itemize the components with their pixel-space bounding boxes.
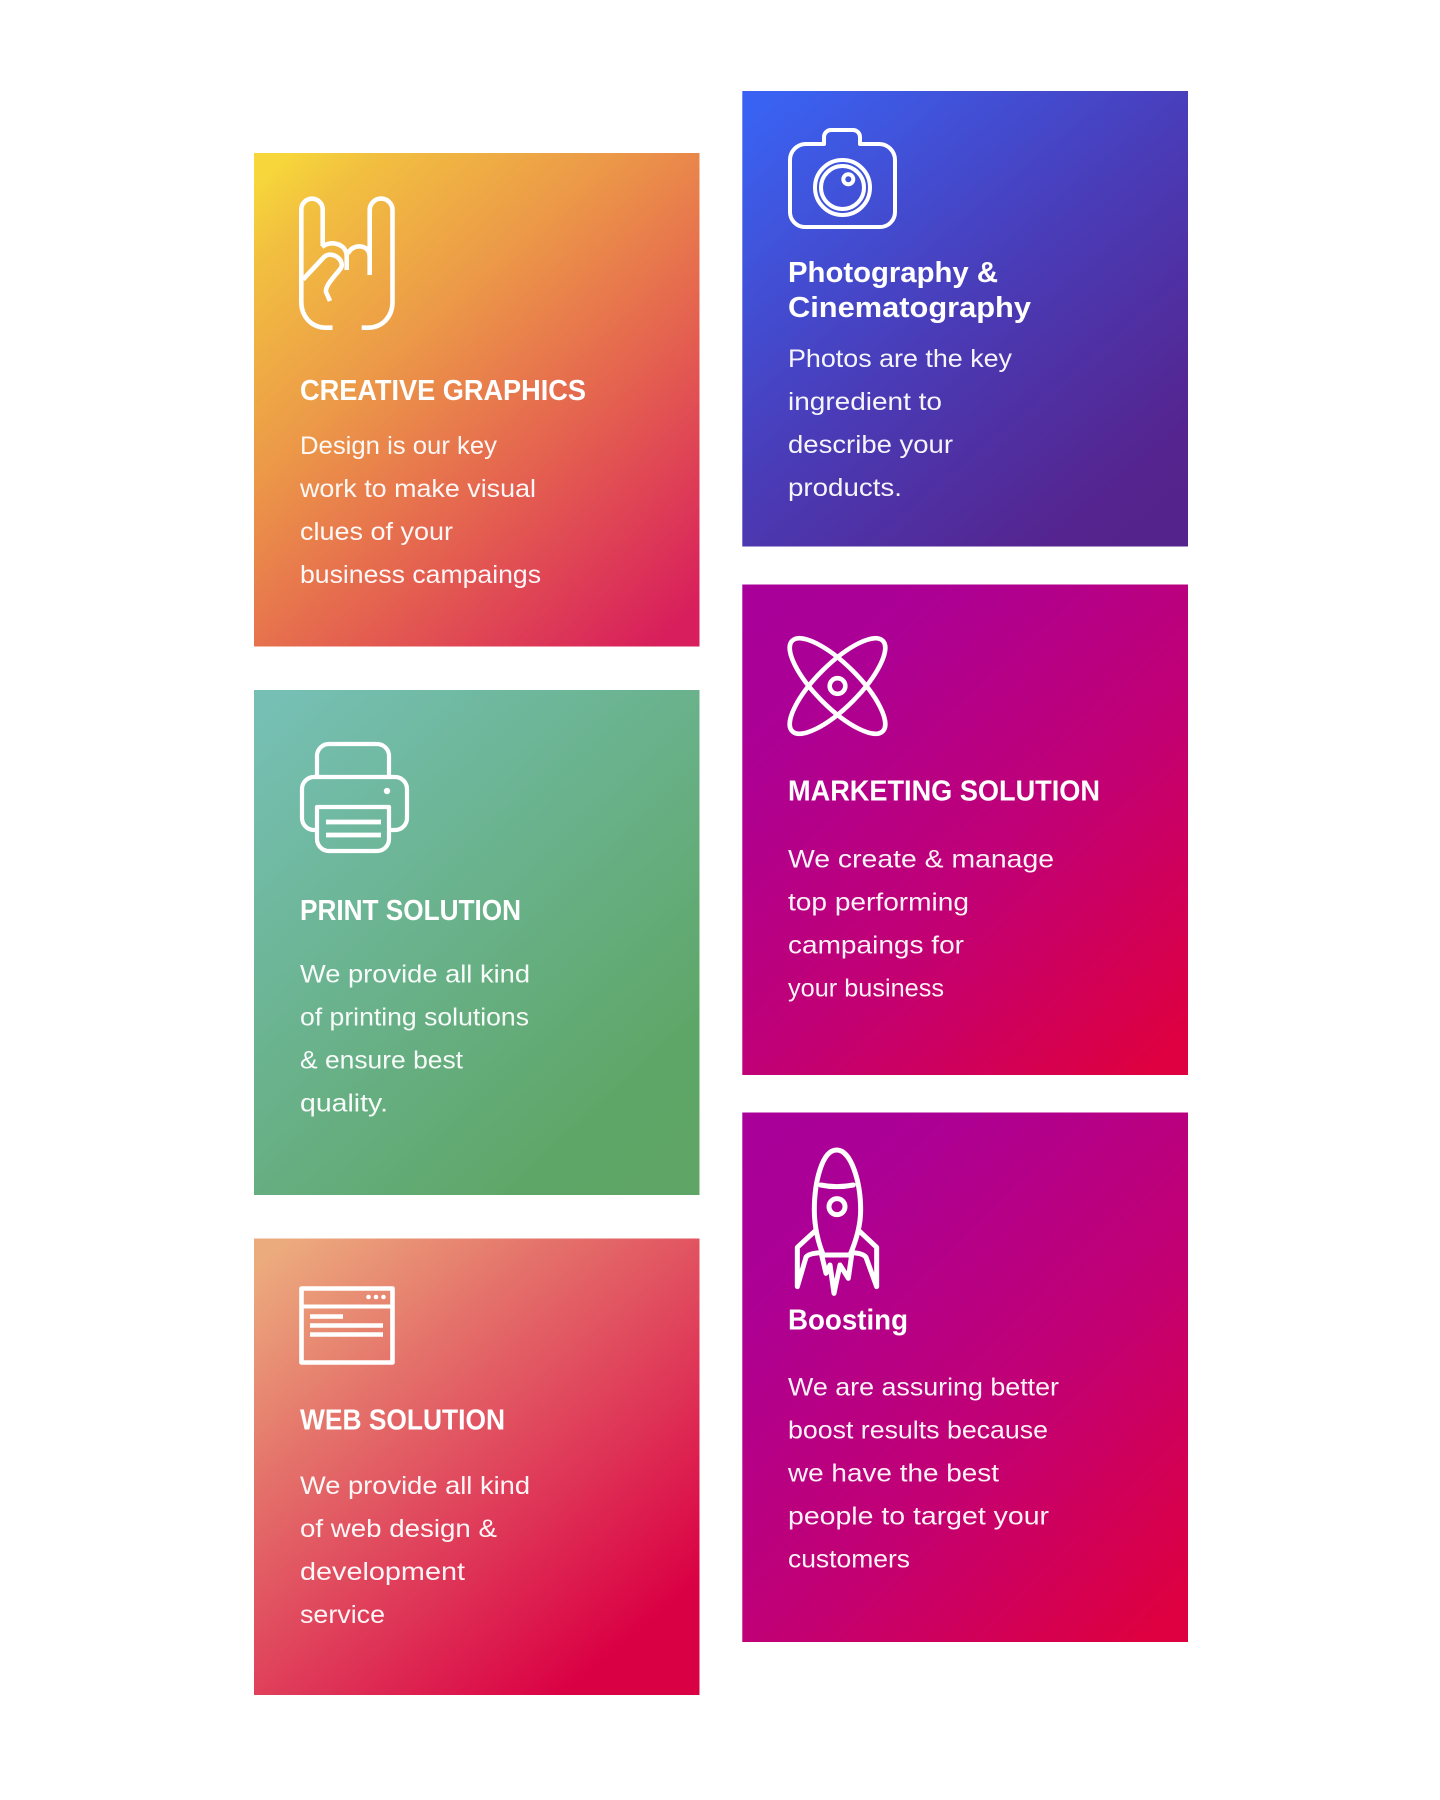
body text <box>300 1472 530 1629</box>
body text: your business <box>788 974 944 1002</box>
icon: rock hand <box>301 199 392 328</box>
panel: creative graphics <box>254 153 700 646</box>
panel: photography <box>742 91 1188 546</box>
body text <box>788 345 1013 502</box>
heading <box>788 257 1031 324</box>
body text: Design is our key <box>300 432 498 460</box>
heading: WEB SOLUTION <box>300 1404 505 1436</box>
body text: boost results because <box>788 1416 1048 1444</box>
heading: Cinematography <box>788 292 1031 324</box>
body text: people to target your <box>788 1502 1049 1530</box>
icon: camera <box>790 130 895 227</box>
body text <box>788 846 1054 1002</box>
body text: of web design & <box>300 1515 497 1543</box>
icon: browser window <box>301 1288 393 1362</box>
body text: we have the best <box>787 1460 999 1488</box>
body text: We are assuring better <box>788 1374 1059 1402</box>
body text: Photos are the key <box>788 345 1013 373</box>
body text: products. <box>788 474 902 502</box>
body text: customers <box>788 1546 910 1574</box>
body text: describe your <box>788 431 953 459</box>
body text: & ensure best <box>300 1046 463 1074</box>
body text <box>787 1374 1059 1574</box>
panel: print solution <box>254 690 700 1195</box>
body text: quality. <box>300 1090 388 1118</box>
body text: development <box>300 1558 465 1586</box>
heading: MARKETING SOLUTION <box>788 776 1100 808</box>
heading: CREATIVE GRAPHICS <box>300 375 586 407</box>
heading: PRINT SOLUTION <box>300 895 521 927</box>
body text: work to make visual <box>299 475 536 503</box>
body text: of printing solutions <box>300 1004 529 1032</box>
body text <box>299 432 541 589</box>
body text <box>300 960 530 1118</box>
body text: clues of your <box>300 518 453 546</box>
panel: marketing solution <box>742 584 1188 1075</box>
body text: We create & manage <box>788 846 1054 874</box>
icon: atom <box>777 626 898 746</box>
body text: business campaings <box>300 561 541 589</box>
panel: web solution <box>254 1238 700 1695</box>
panel: boosting <box>742 1112 1188 1642</box>
body text: top performing <box>788 888 969 916</box>
body text: service <box>300 1601 385 1629</box>
icon: rocket <box>797 1150 877 1293</box>
icon: printer <box>302 744 407 851</box>
body text: We provide all kind <box>300 960 530 988</box>
body text: We provide all kind <box>300 1472 530 1500</box>
body text: ingredient to <box>788 388 942 416</box>
body text: campaings for <box>788 932 964 960</box>
heading: Photography & <box>788 257 998 289</box>
heading: Boosting <box>788 1304 908 1336</box>
